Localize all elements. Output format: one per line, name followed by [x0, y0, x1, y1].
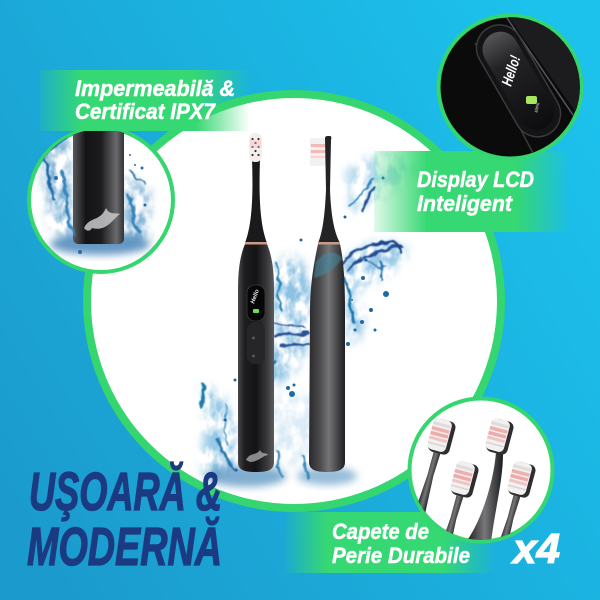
brush head front [245, 133, 267, 243]
water splash [200, 155, 420, 487]
heading label: display: Display LCD [417, 167, 534, 192]
front body [238, 244, 274, 472]
control pad [247, 322, 265, 364]
main title: MODERNĂ [27, 517, 222, 577]
toothbrush: front view [238, 133, 274, 472]
toothbrush: side view [309, 136, 345, 472]
label band: brush heads [285, 512, 495, 573]
circle inset: waterproof detail [29, 126, 173, 272]
circle inset: LCD closeup [438, 15, 600, 158]
brush head 3 [466, 417, 515, 542]
main title [27, 462, 222, 577]
heading label: waterproof: Certificat IPX7 [75, 99, 217, 124]
brush head 2 [446, 462, 478, 534]
brush head 4 [500, 462, 536, 538]
heading label: brush heads: Perie Durabile [332, 543, 470, 568]
rose gold ring side [318, 242, 340, 244]
bristles side [310, 138, 326, 166]
brush head 1 [418, 418, 456, 512]
circle inset: LCD closeup: 100% [533, 102, 541, 113]
head and neck side [318, 136, 340, 243]
heading label: brush heads: Capete de [332, 519, 429, 544]
heading label: waterproof: Impermeabilă & [75, 76, 235, 101]
water over side body [314, 252, 342, 278]
main white circle with green ring [87, 94, 501, 508]
circle inset: four brush heads [408, 398, 552, 564]
LCD display [247, 285, 265, 321]
LCD display: Hello [250, 289, 261, 305]
main title: UŞOARĂ & [29, 462, 222, 522]
rose gold ring [245, 242, 267, 244]
logo [246, 450, 268, 462]
heading label: brush heads [332, 519, 470, 568]
side body [309, 244, 345, 472]
circle inset: LCD closeup: Hello! [499, 53, 524, 88]
heading label: display: Inteligent [417, 191, 514, 216]
label band: waterproof [40, 70, 250, 131]
heading label: display [417, 167, 534, 216]
x4 quantity label: x4 [511, 525, 560, 572]
label band: display [374, 151, 570, 232]
heading label: waterproof [75, 76, 235, 124]
